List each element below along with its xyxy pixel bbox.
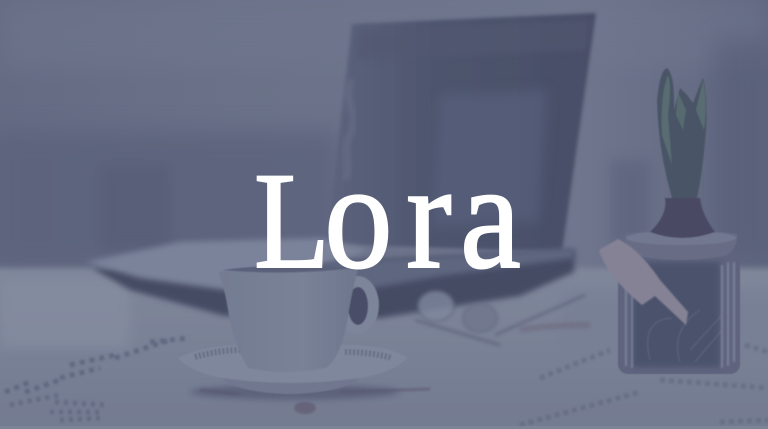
title: Lora: L bbox=[254, 145, 330, 297]
saucer shadow bbox=[190, 384, 400, 400]
laptop bbox=[86, 13, 596, 318]
laptop screen bbox=[326, 13, 596, 252]
laptop underside shadow bbox=[92, 250, 575, 318]
plant in glass jar bbox=[599, 68, 740, 374]
jar bbox=[618, 250, 740, 374]
lace tablecloth bbox=[5, 338, 768, 425]
ribbon bbox=[599, 239, 688, 325]
jar rim bbox=[625, 230, 737, 260]
leaves bbox=[657, 68, 707, 198]
saucer bbox=[178, 345, 407, 394]
laptop base bbox=[86, 238, 370, 290]
title: Lora: ora bbox=[324, 132, 521, 301]
cup body bbox=[218, 266, 358, 372]
table bbox=[0, 268, 768, 429]
glasses on table bbox=[415, 291, 590, 345]
teacup and saucer bbox=[178, 265, 407, 400]
photo bottom edge bbox=[0, 426, 768, 429]
bulb bbox=[650, 198, 715, 238]
handle bbox=[337, 276, 379, 334]
